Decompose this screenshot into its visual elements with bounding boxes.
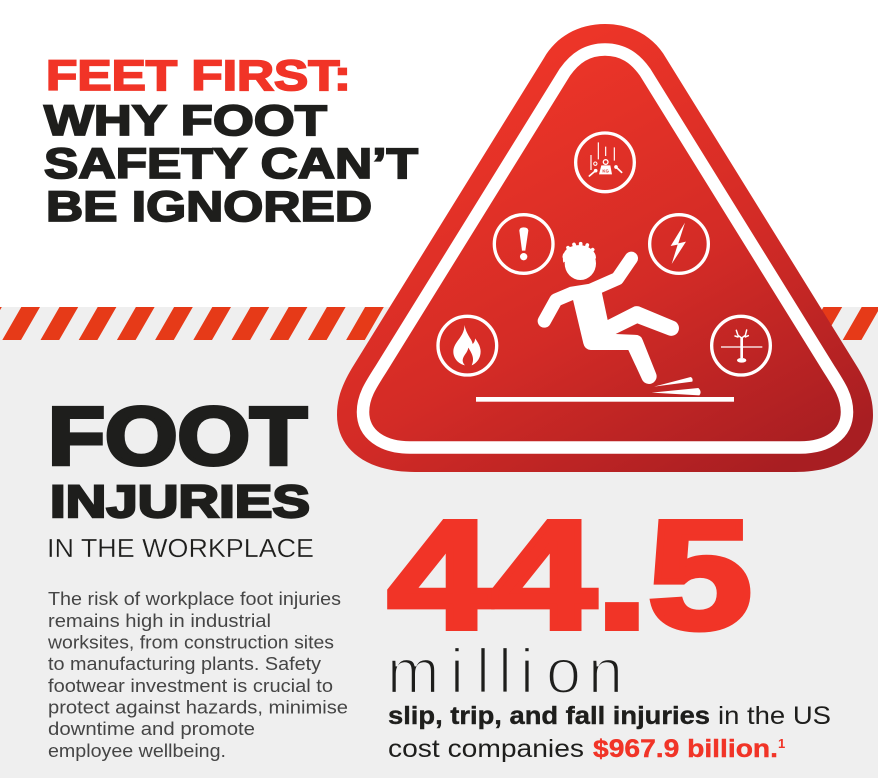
body paragraph: downtime and promote	[48, 718, 255, 739]
cost companies: cost companies	[388, 735, 584, 763]
triangle outer shape	[337, 24, 873, 472]
icon: lightning bolt	[650, 215, 708, 273]
footnote marker: 1	[778, 736, 785, 751]
heading word: injuries: INJURIES	[50, 476, 310, 527]
title line: why foot: WHY FOOT	[44, 97, 327, 145]
icon: sprinkler	[712, 316, 770, 375]
warning triangle sign	[337, 24, 873, 472]
title line: feet first: FEET FIRST:	[46, 52, 351, 100]
title line: be ignored: BE IGNORED	[46, 183, 372, 231]
icon: exclamation mark	[494, 215, 553, 273]
title line: safety can't: SAFETY CAN’T	[44, 140, 418, 188]
body paragraph: footwear investment is crucial to	[48, 675, 333, 696]
icon: falling objects	[576, 133, 634, 192]
body paragraph: remains high in industrial	[48, 610, 271, 631]
cost amount: $967.9 billion.	[593, 735, 778, 763]
heading line: in the workplace: IN THE WORKPLACE	[47, 533, 314, 563]
hazard stripes band	[0, 307, 878, 340]
icon: slipping worker figure	[544, 244, 701, 395]
grey lower background	[0, 307, 878, 778]
heading word: foot: FOOT	[48, 391, 307, 482]
title	[44, 52, 418, 231]
body paragraph	[47, 588, 348, 761]
icon: falling objects: KG	[602, 168, 610, 173]
slip marks	[652, 377, 701, 395]
body paragraph: employee wellbeing.	[48, 740, 226, 761]
bold: slip, trip and fall: slip, trip, and fall injuries	[388, 702, 710, 730]
ground line	[476, 397, 734, 402]
icon: flame	[438, 316, 497, 375]
in the US: in the US	[718, 702, 831, 730]
statistic: 44.5 million	[387, 489, 752, 707]
body paragraph: worksites, from construction sites	[47, 632, 334, 652]
worker torso and legs	[573, 292, 679, 384]
worker arms	[544, 258, 631, 321]
heading: foot injuries	[47, 391, 314, 563]
worker head and helmet	[563, 244, 596, 280]
body paragraph: to manufacturing plants. Safety	[48, 653, 322, 674]
body paragraph: The risk of workplace foot injuries	[48, 588, 341, 609]
triangle white inner border	[363, 50, 847, 448]
statistic description	[388, 702, 831, 763]
body paragraph: protect against hazards, minimise	[48, 696, 348, 718]
big number: 44.5	[388, 489, 752, 661]
million label: million	[387, 637, 623, 707]
